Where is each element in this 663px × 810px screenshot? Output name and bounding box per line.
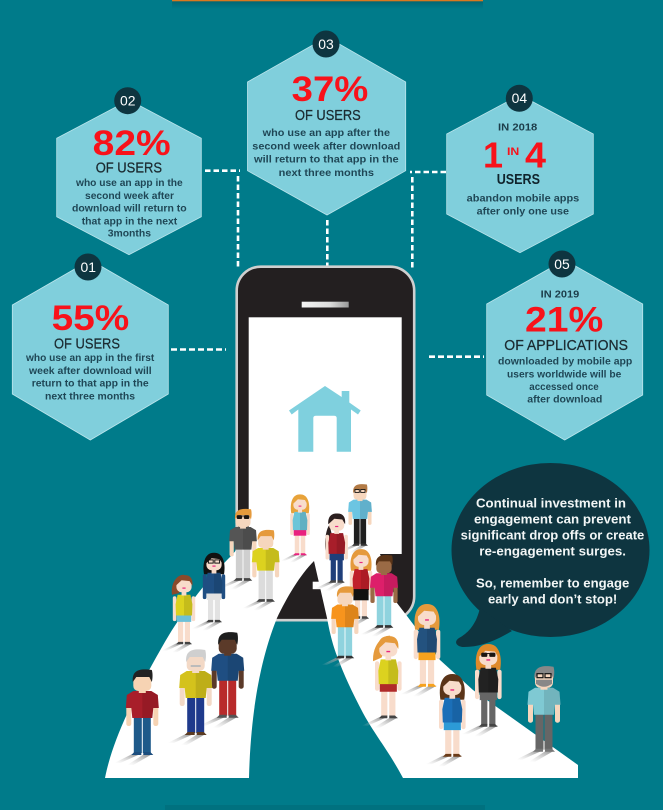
panel: 02 hexagon stat xyxy=(57,87,201,255)
panel: 04 hexagon stat: abandon mobile apps xyxy=(467,192,579,204)
speech bubble: engagement can prevent xyxy=(474,512,632,526)
bottom banner shadow xyxy=(165,805,485,810)
panel: 01 hexagon stat: who use an app in the first xyxy=(25,352,155,364)
person: woman yellow top blue shorts xyxy=(162,575,195,652)
top banner edge xyxy=(172,0,483,9)
panel: 01 hexagon stat xyxy=(12,254,168,440)
panel: 01 hexagon stat: 01 xyxy=(80,259,96,275)
panel: 01 hexagon stat: week after download will xyxy=(28,365,152,377)
panel: 04 hexagon stat: IN 2018 xyxy=(498,122,537,134)
panel: 01 hexagon stat: next three months xyxy=(45,390,135,402)
panel: 03 hexagon stat: OF USERS xyxy=(295,107,361,124)
person: man yellow shirt white hair xyxy=(168,649,212,745)
panel: 04 hexagon stat: USERS xyxy=(497,172,540,188)
panel: 04 hexagon stat: 1 xyxy=(483,134,503,175)
panel: 03 hexagon stat: who use an app after the xyxy=(262,127,390,139)
speech bubble xyxy=(452,463,650,647)
phone xyxy=(237,267,414,620)
panel: 02 hexagon stat: that app in the next xyxy=(82,215,178,227)
panel: 05 hexagon stat: accessed once xyxy=(529,381,599,393)
person: woman sunglasses black top xyxy=(462,644,502,736)
panel: 03 hexagon stat: second week after download xyxy=(252,140,400,152)
panel: 01 hexagon stat: return to that app in the xyxy=(32,378,149,390)
panel: 04 hexagon stat: 4 xyxy=(525,134,546,175)
person: man grey hair glasses xyxy=(516,666,560,762)
panel: 05 hexagon stat: 21% xyxy=(525,301,603,340)
person: woman blue top blue skirt xyxy=(426,674,466,766)
panel: 05 hexagon stat: after download xyxy=(527,394,602,406)
panel: 04 hexagon stat xyxy=(447,85,593,253)
speech bubble: early and don’t stop! xyxy=(488,592,617,606)
speech bubble: significant drop offs or create xyxy=(461,528,644,542)
panel: 05 hexagon stat: users worldwide will be xyxy=(507,369,621,381)
panel: 05 hexagon stat xyxy=(487,250,643,440)
panel: 05 hexagon stat: IN 2019 xyxy=(541,288,579,300)
speech bubble: re-engagement surges. xyxy=(479,544,626,558)
panel: 04 hexagon stat: 04 xyxy=(512,90,527,106)
connector: 04 to phone xyxy=(410,172,446,270)
person: man sunglasses grey shirt xyxy=(219,509,257,589)
panel: 02 hexagon stat: 3months xyxy=(108,228,151,240)
person: woman glasses navy jacket xyxy=(192,553,225,630)
panel: 03 hexagon stat: will return to that app in the xyxy=(253,154,399,166)
panel: 05 hexagon stat: downloaded by mobile app xyxy=(498,356,632,368)
person: man glasses blue shirt xyxy=(340,484,372,553)
road xyxy=(105,535,578,778)
panel: 02 hexagon stat: OF USERS xyxy=(96,159,162,176)
panel: 02 hexagon stat: 82% xyxy=(93,124,171,163)
connector: 02 to phone xyxy=(205,171,240,268)
speech bubble: Continual investment in xyxy=(476,496,626,510)
person: woman navy top orange skirt xyxy=(400,604,440,696)
panel: 02 hexagon stat: download will return to xyxy=(72,203,187,215)
panel: 04 hexagon stat: after only one use xyxy=(477,206,569,218)
panel: 01 hexagon stat: OF USERS xyxy=(54,336,120,353)
person: woman yellow top red shorts xyxy=(362,636,402,728)
panel: 01 hexagon stat: 55% xyxy=(52,299,129,338)
person: man red shirt black hair xyxy=(114,669,159,765)
panel: 03 hexagon stat xyxy=(248,30,406,215)
person: man yellow shirt xyxy=(242,530,280,610)
panel: 04 hexagon stat: IN xyxy=(507,146,519,158)
panel: 03 hexagon stat: 37% xyxy=(292,70,368,109)
person: man navy shirt red pants xyxy=(200,632,244,728)
person: woman ponytail red top xyxy=(314,513,348,591)
panel: 02 hexagon stat: who use an app in the xyxy=(75,177,183,189)
person: woman red top black skirt xyxy=(339,549,372,627)
panel: 02 hexagon stat: 02 xyxy=(120,93,136,109)
panel: 05 hexagon stat: 05 xyxy=(554,256,570,272)
connector: 03 to phone xyxy=(326,220,329,266)
person: man orange shirt xyxy=(321,586,359,667)
person: woman pink shorts xyxy=(280,494,310,562)
panel: 03 hexagon stat: 03 xyxy=(318,36,334,52)
icon: home xyxy=(289,386,361,452)
speech bubble: So, remember to engage xyxy=(476,576,629,590)
connector: 01 to phone xyxy=(171,348,226,351)
panel: 05 hexagon stat: OF APPLICATIONS xyxy=(504,337,628,354)
panel: 02 hexagon stat: second week after xyxy=(85,190,174,202)
connector: 05 to phone xyxy=(429,355,484,358)
person: man pink shirt xyxy=(360,555,398,636)
panel: 03 hexagon stat: next three months xyxy=(279,167,374,179)
